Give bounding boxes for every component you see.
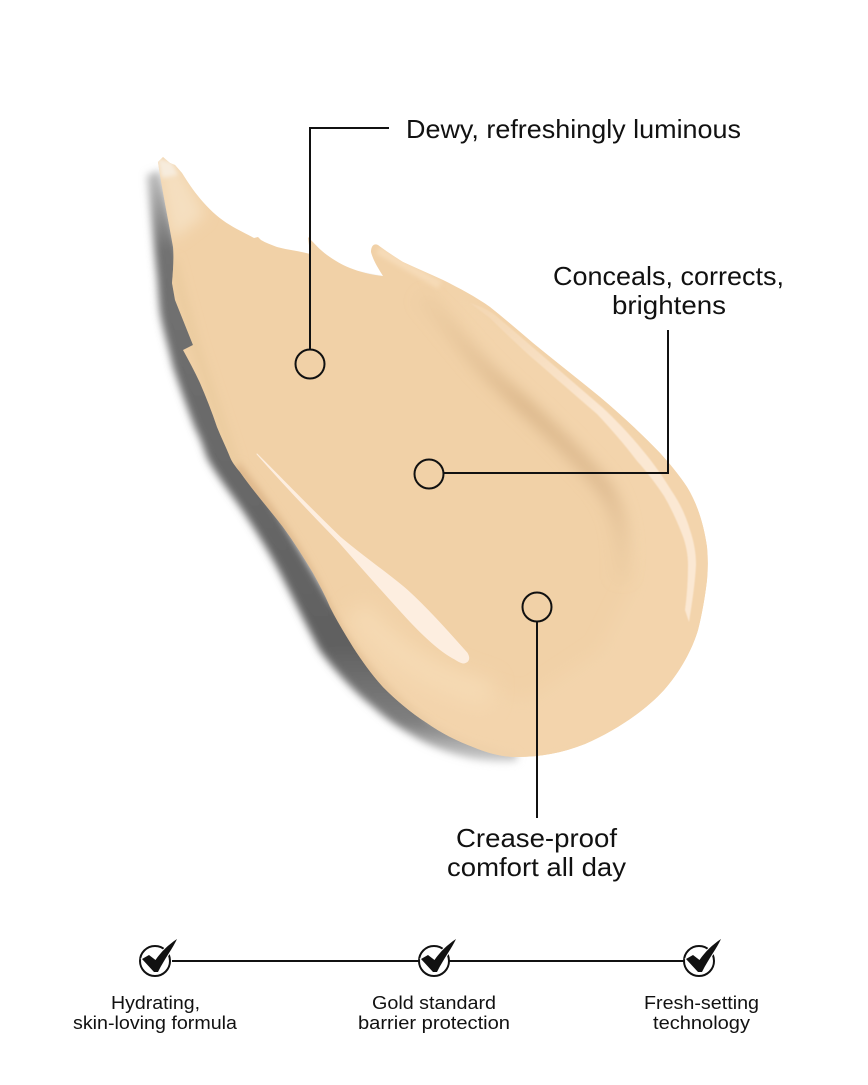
marker (414, 460, 444, 488)
benefit: gold standard (358, 939, 510, 1033)
leader line (444, 330, 668, 473)
callout: conceals, corrects, brightens (414, 261, 784, 488)
leader line (536, 622, 538, 818)
label: skin-loving formula (73, 1013, 238, 1033)
marker (522, 592, 552, 622)
glow under highlight (358, 612, 464, 682)
foundation smear (158, 157, 708, 757)
label: technology (653, 1013, 750, 1033)
benefits row (73, 939, 759, 1033)
label: brightens (612, 290, 726, 320)
notch shadow (350, 270, 385, 280)
label: comfort all day (447, 852, 626, 882)
label (73, 993, 238, 1033)
icon: check (419, 939, 456, 976)
callout: crease-proof comfort (447, 592, 626, 882)
product swatch with shadow (147, 155, 725, 775)
label: Fresh-setting (644, 993, 759, 1013)
label (553, 261, 784, 320)
light rim (354, 284, 708, 757)
swatch shading (155, 155, 725, 775)
label: Gold standard (372, 993, 496, 1013)
tip lightening (160, 166, 204, 236)
left edge tone (172, 260, 235, 465)
label: barrier protection (358, 1013, 510, 1033)
callout: dewy, refreshingly luminous (296, 114, 741, 378)
connector line (172, 960, 685, 962)
benefit: fresh-setting (644, 939, 759, 1033)
icon: check (140, 939, 177, 976)
very tip (157, 158, 178, 178)
lower edge tone (235, 464, 408, 709)
label (447, 823, 626, 882)
label: Crease-proof (456, 823, 618, 853)
upper tail light band (378, 250, 440, 285)
label: Conceals, corrects, (553, 261, 784, 291)
icon: check (684, 939, 721, 976)
cast shadow (147, 170, 517, 761)
benefit: hydrating (73, 939, 238, 1033)
label: Hydrating, (111, 993, 200, 1013)
lower highlight (257, 454, 469, 663)
label (358, 993, 510, 1033)
label: Dewy, refreshingly luminous (406, 114, 741, 144)
crease shadow (457, 337, 624, 529)
leader line (310, 128, 389, 349)
upper right highlight (470, 303, 696, 622)
marker (296, 350, 324, 378)
label (644, 993, 759, 1033)
